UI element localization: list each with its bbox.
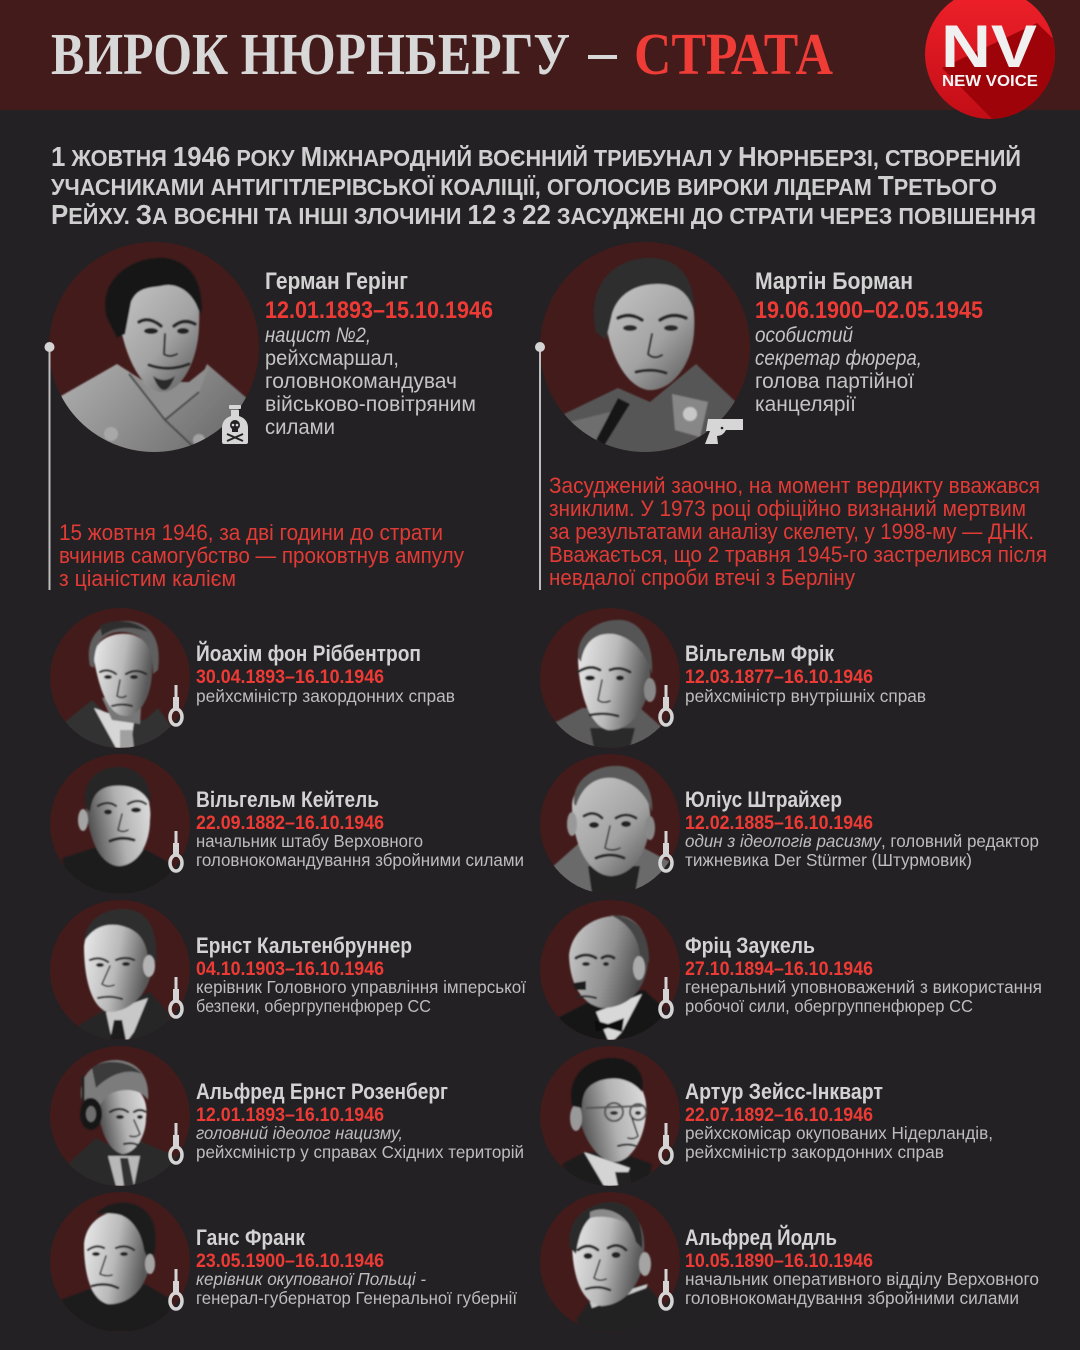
icon: noose [170, 977, 182, 1017]
text block [685, 1079, 993, 1162]
text block: 10.05.1890–16.10.1946 [685, 1250, 873, 1272]
portrait [50, 900, 190, 1040]
text block: 22.09.1882–16.10.1946 [196, 812, 384, 834]
text block: головний ідеолог нацизму, [196, 1123, 403, 1143]
text block: головнокомандування збройними силами [196, 850, 524, 870]
fate note: вчинив самогубство — проковтнув ампулу [59, 543, 464, 568]
portrait [540, 608, 680, 748]
text block: головнокомандування збройними силами [685, 1288, 1019, 1308]
dates: 19.06.1900–02.05.1945 [755, 297, 983, 324]
text block: Вільгельм Кейтель [196, 787, 379, 812]
fate note: за результатами аналізу скелету, у 1998-му — ДНК. [549, 519, 1034, 544]
text block: один з ідеологів расизму, головний редактор [685, 831, 1039, 851]
text block [196, 787, 524, 870]
fate note [549, 473, 1047, 590]
panel: Seyss-Inquart [540, 1046, 993, 1186]
icon: noose [170, 1123, 182, 1163]
fate note: 15 жовтня 1946, за дві години до страти [59, 520, 443, 545]
panel: Jodl [540, 1192, 1039, 1332]
icon: noose [660, 1269, 672, 1309]
icon: pistol [705, 419, 743, 444]
name: Герман Герінг [265, 268, 408, 295]
icon: poison bottle [222, 405, 248, 444]
text block: рейхсміністр закордонних справ [685, 1142, 944, 1162]
text block: рейхскомісар окупованих Нідерландів, [685, 1123, 993, 1143]
text block: 30.04.1893–16.10.1946 [196, 666, 384, 688]
panel: Frick [540, 608, 926, 748]
fate note: Вважається, що 2 травня 1945-го застрелився після [549, 542, 1047, 567]
description: особистий [755, 324, 853, 347]
intro text [51, 141, 1036, 230]
text block: начальник штабу Верховного [196, 831, 423, 851]
panel: Ribbentrop [50, 608, 455, 748]
portrait [540, 1046, 680, 1186]
logo: NV New Voice: NEW VOICE [942, 73, 1038, 90]
timeline left [44, 342, 54, 590]
text block [196, 641, 455, 706]
panel: Rosenberg [50, 1046, 524, 1186]
text block: начальник оперативного відділу Верховного [685, 1269, 1039, 1289]
title: СТРАТА [634, 21, 833, 87]
description: рейхсмаршал, [265, 347, 399, 370]
description: силами [265, 416, 335, 439]
intro text: УЧАСНИКАМИ АНТИГІТЛЕРІВСЬКОЇ КОАЛІЦІЇ, ОГОЛОСИВ ВИРОКИ ЛІДЕРАМ ТРЕТЬОГО [51, 170, 997, 201]
panel: Martin Bormann [535, 242, 1047, 590]
text block: 27.10.1894–16.10.1946 [685, 958, 873, 980]
portrait: Goering [49, 242, 261, 454]
text block: рейхсміністр внутрішніх справ [685, 686, 926, 706]
fate note: невдалої спроби втечі з Берліну [549, 565, 855, 590]
fate note: Засуджений заочно, на момент вердикту вважався [549, 473, 1040, 498]
text block: керівник Головного управління імперської [196, 977, 526, 997]
panel: Hermann Goering [44, 242, 493, 591]
portrait [540, 754, 680, 894]
panel: Streicher [540, 754, 1039, 894]
text block [196, 933, 526, 1016]
text block: 12.01.1893–16.10.1946 [196, 1104, 384, 1126]
text block: Юліус Штрайхер [685, 787, 842, 812]
portrait [50, 608, 190, 748]
text block: 12.02.1885–16.10.1946 [685, 812, 873, 834]
text block [685, 787, 1039, 870]
text block: Фріц Заукель [685, 933, 815, 958]
text block [196, 1225, 517, 1308]
name: Мартін Борман [755, 268, 913, 295]
portrait [540, 1192, 680, 1332]
portrait [540, 900, 680, 1040]
text block [685, 641, 926, 706]
title: ВИРОК НЮРНБЕРГУ [51, 21, 570, 87]
timeline right [535, 342, 545, 590]
description: нацист №2, [265, 324, 371, 347]
header band [0, 0, 1080, 110]
description: військово-повітряним [265, 393, 476, 416]
intro text: РЕЙХУ. ЗА ВОЄННІ ТА ІНШІ ЗЛОЧИНИ 12 З 22 ЗАСУДЖЕНІ ДО СТРАТИ ЧЕРЕЗ ПОВІШЕННЯ [51, 199, 1036, 230]
icon: noose [660, 1123, 672, 1163]
text block: Ернст Кальтенбруннер [196, 933, 412, 958]
portrait [50, 754, 190, 894]
icon: noose [170, 1269, 182, 1309]
text block: робочої сили, обергруппенфюрер СС [685, 996, 973, 1016]
portrait [50, 1192, 190, 1332]
description [265, 324, 476, 439]
portrait: Bormann [540, 242, 750, 454]
icon: noose [170, 685, 182, 725]
icon: noose [660, 831, 672, 871]
panel: Frank [50, 1192, 517, 1332]
intro text: 1 ЖОВТНЯ 1946 РОКУ МІЖНАРОДНИЙ ВОЄННИЙ ТРИБУНАЛ У НЮРНБЕРЗІ, СТВОРЕНИЙ [51, 141, 1021, 172]
text block: рейхсміністр закордонних справ [196, 686, 455, 706]
dates: 12.01.1893–15.10.1946 [265, 297, 493, 324]
text block: генеральний уповноважений з використання [685, 977, 1042, 997]
text block: Ганс Франк [196, 1225, 306, 1250]
text block: керівник окупованої Польщі - [196, 1269, 426, 1289]
text block: безпеки, обергрупенфюрер СС [196, 996, 431, 1016]
text block: Альфред Йодль [685, 1225, 837, 1250]
text block: 04.10.1903–16.10.1946 [196, 958, 384, 980]
description [755, 324, 922, 416]
text block: Альфред Ернст Розенберг [196, 1079, 448, 1104]
description: канцелярії [755, 393, 856, 416]
fate note [59, 520, 464, 591]
text block [685, 1225, 1039, 1308]
logo: NV New Voice [925, 0, 1055, 119]
icon: noose [170, 831, 182, 871]
text block: 12.03.1877–16.10.1946 [685, 666, 873, 688]
logo: NV New Voice: NV [941, 13, 1037, 80]
icon: noose [660, 685, 672, 725]
panel: Keitel [50, 754, 524, 894]
icon: noose [660, 977, 672, 1017]
text block: Йоахім фон Ріббентроп [196, 641, 421, 666]
description: головнокомандувач [265, 370, 457, 393]
text block: генерал-губернатор Генеральної губернії [196, 1288, 517, 1308]
text block [685, 933, 1042, 1016]
text block [196, 1079, 524, 1162]
text block: 22.07.1892–16.10.1946 [685, 1104, 873, 1126]
text block: Артур Зейсс-Інкварт [685, 1079, 883, 1104]
fate note: зниклим. У 1973 році офіційно визнаний мертвим [549, 496, 1026, 521]
text block: рейхсміністр у справах Східних територій [196, 1142, 524, 1162]
panel: Sauckel [540, 900, 1042, 1040]
text block: 23.05.1900–16.10.1946 [196, 1250, 384, 1272]
description: голова партійної [755, 370, 914, 393]
panel: Kaltenbrunner [50, 900, 526, 1040]
fate note: з ціаністим калієм [59, 566, 236, 591]
text block: тижневика Der Stürmer (Штурмовик) [685, 850, 972, 870]
description: секретар фюрера, [755, 347, 922, 370]
text block: Вільгельм Фрік [685, 641, 835, 666]
portrait [50, 1046, 190, 1186]
